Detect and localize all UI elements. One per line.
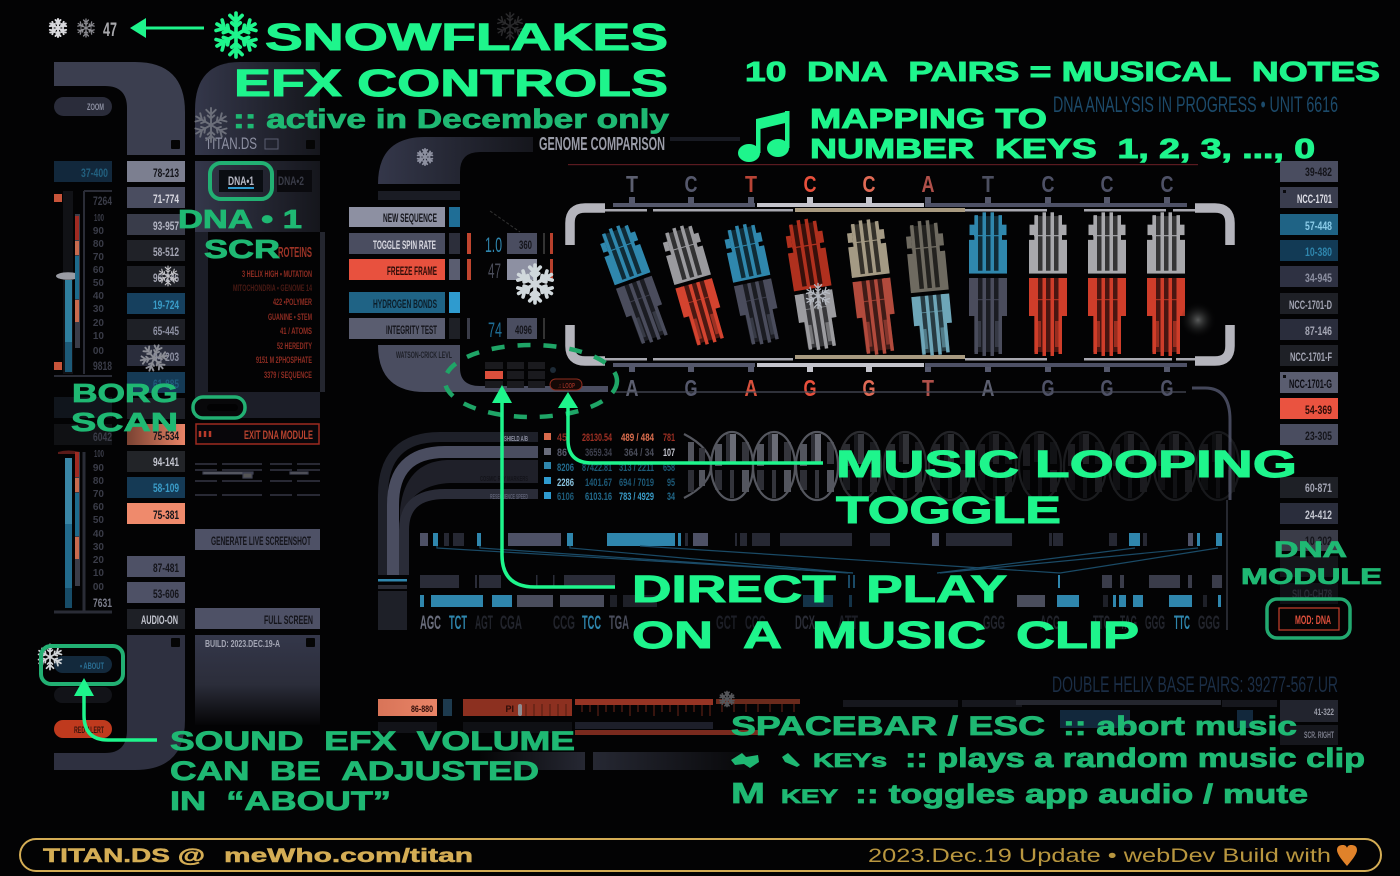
orange readout: 86-880	[411, 704, 433, 714]
heading: efx controls: EFX CONTROLS	[234, 63, 668, 105]
callout: DNA 1 SCR	[178, 163, 302, 264]
base letters bottom: G	[804, 375, 816, 401]
proteins readout: 3 HELIX HIGH • MUTATION	[242, 269, 312, 279]
data table: 95	[667, 477, 675, 489]
data table: 2286	[557, 477, 574, 489]
build info panel	[195, 635, 320, 725]
icon: music note	[738, 111, 790, 162]
DNA strands	[596, 212, 1185, 357]
base letters top: C	[862, 171, 876, 197]
right code buttons: 10-202	[1305, 534, 1332, 548]
control buttons	[349, 207, 460, 339]
right code buttons: NCC-1701	[1297, 192, 1332, 206]
control buttons: NEW SEQUENCE	[383, 211, 437, 225]
base letters bottom: A	[744, 375, 758, 401]
icon: falling flake gauge	[719, 691, 735, 707]
upper slider gauge: 70	[93, 252, 104, 263]
highlight box	[210, 163, 272, 199]
panel: right code column	[1052, 92, 1339, 697]
exit DNA module button	[196, 424, 319, 444]
icon: green snowflake	[214, 13, 258, 57]
link lines between rows	[437, 546, 1218, 573]
thin data traces	[195, 464, 320, 495]
red tick gauge: PI	[505, 704, 514, 714]
data table: 694 / 7019	[619, 477, 654, 489]
red alert pill	[54, 720, 112, 738]
codon labels: TTC	[1093, 613, 1110, 634]
dim blocks under gauge: 6042	[93, 430, 112, 444]
mod DNA button: MOD: DNA	[1295, 613, 1331, 627]
code buttons: 61-885	[153, 377, 179, 391]
codon labels: CGA	[500, 613, 522, 634]
music clip grid	[485, 362, 556, 388]
codon labels: AGT	[475, 613, 493, 634]
shortcut: keys: KEYs	[813, 751, 887, 772]
icon: falling flake about	[37, 644, 63, 670]
codon labels: DCX	[795, 613, 815, 634]
panel: lower frame and data table: GGG	[1198, 613, 1220, 634]
upper slider gauge	[54, 191, 112, 376]
icon: falling flake bright	[516, 265, 554, 303]
callout: keyboard shortcuts	[731, 711, 1365, 810]
lower-left elbow frame	[54, 635, 185, 770]
callout: borg scan	[71, 378, 245, 437]
data table: SHIELD A/B	[504, 436, 528, 443]
data table: 8206	[557, 462, 574, 474]
base letters top: C	[804, 171, 816, 197]
arrow: direct play	[492, 385, 615, 587]
lower slider gauge: 90	[93, 463, 104, 474]
control buttons: HYDROGEN BONDS	[373, 297, 437, 311]
label: can be adjusted: CAN BE ADJUSTED	[170, 756, 539, 786]
viewer brackets	[570, 208, 1230, 361]
codon labels: TAG	[1120, 613, 1137, 634]
label: in about: IN “ABOUT”	[170, 786, 391, 816]
data table: 34	[667, 491, 676, 503]
proteins readout: 41 / ATOMS	[280, 326, 312, 336]
base letters bottom: G	[684, 375, 698, 401]
label: scan: SCAN	[71, 407, 178, 437]
right code buttons: SILO-CH78	[1292, 587, 1332, 601]
spin rate readouts: 74	[488, 319, 502, 342]
icon: snowflake white solid	[49, 19, 67, 37]
heading: snowflakes: SNOWFLAKES	[265, 17, 668, 59]
DNA tabs: DNA•1	[228, 174, 254, 188]
lower slider gauge: 80	[93, 476, 104, 487]
generate live screenshot button: GENERATE LIVE SCREENSHOT	[211, 534, 311, 548]
code buttons: 58-512	[153, 245, 179, 259]
sequence bar row 1	[420, 533, 1222, 546]
codon labels: GGG	[1145, 613, 1165, 634]
codon labels: ATT	[838, 613, 858, 634]
heading: on a music clip: ON A MUSIC CLIP	[632, 615, 1139, 657]
upper slider gauge: 60	[93, 265, 104, 276]
loop toggle: ♫ LOOP	[558, 383, 575, 390]
data table: 6106	[557, 491, 574, 503]
code buttons: 53-606	[153, 587, 179, 601]
about button: • ABOUT	[80, 661, 104, 671]
label: DNA: DNA	[1274, 537, 1347, 562]
upper slider gauge: 9818	[93, 359, 112, 373]
heading: direct play: DIRECT PLAY	[632, 569, 1007, 611]
base letters bottom: T	[922, 375, 934, 401]
right code buttons	[1280, 161, 1338, 604]
base letters top: C	[1160, 171, 1174, 197]
sequence bar row 3	[420, 595, 1221, 607]
spin rate readouts: 1.0	[485, 234, 502, 257]
heading: genome comparison: GENOME COMPARISON	[539, 134, 665, 154]
codon labels: TGA	[609, 613, 629, 634]
base letters top: C	[1100, 171, 1114, 197]
proteins readout	[233, 244, 312, 380]
base letters top: T	[745, 171, 757, 197]
label: DNA 1: DNA • 1	[178, 204, 302, 234]
data table: 1401.67	[585, 477, 612, 489]
dim blocks under gauge	[54, 397, 112, 445]
icon: snowflake thin	[77, 19, 95, 37]
footer update note: 2023.Dec.19 Update • webDev Build with	[868, 846, 1331, 867]
upper slider gauge: 50	[93, 278, 104, 289]
upper slider gauge: 90	[93, 226, 104, 237]
right code buttons: NCC-1701-F	[1290, 350, 1332, 364]
panel: code button column	[127, 161, 185, 629]
icon: falling flake column	[158, 266, 178, 286]
base letters bottom: G	[1100, 375, 1114, 401]
loop toggle	[550, 379, 582, 390]
lower slider gauge: 7631	[93, 596, 112, 610]
top-left elbow frame	[54, 62, 185, 155]
data table	[480, 432, 676, 503]
highlight box	[1267, 599, 1350, 638]
code buttons: 58-109	[153, 481, 179, 495]
titan header	[195, 62, 320, 155]
data table: 107	[663, 447, 675, 459]
base letters top: T	[626, 171, 638, 197]
icon: falling flake top	[496, 12, 524, 40]
heading: music looping: MUSIC LOOPING	[836, 444, 1297, 486]
upper slider gauge: 30	[93, 304, 104, 315]
note: active in December: :: active in December only	[233, 104, 669, 134]
right code buttons: 23-305	[1305, 429, 1332, 443]
heading: toggle: TOGGLE	[836, 490, 1061, 532]
button 37-400: 37-400	[81, 166, 108, 180]
generate live screenshot button	[195, 529, 320, 550]
shortcut: abort music: :: abort music	[1063, 711, 1297, 741]
arrow: music looping	[558, 392, 823, 463]
data table: 3659.34	[585, 447, 613, 459]
data table: COSMIC RAY MARKERS	[480, 476, 528, 483]
full screen button	[195, 608, 320, 629]
upper slider gauge: 40	[93, 291, 104, 302]
curved frame bands	[378, 388, 1230, 630]
build info panel: BUILD: 2023.DEC.19-A	[205, 639, 280, 650]
code buttons: 75-381	[153, 508, 179, 522]
upper slider gauge: 80	[93, 239, 104, 250]
bottom elbow frame	[378, 345, 608, 392]
label: borg: BORG	[72, 378, 178, 408]
lower slider gauge: 60	[93, 502, 104, 513]
data table: 87422.81	[582, 462, 612, 474]
right code buttons: 60-871	[1305, 481, 1332, 495]
codon labels: GGG	[983, 613, 1005, 634]
sequence bar row 2	[420, 575, 1222, 588]
full screen button: FULL SCREEN	[264, 613, 313, 627]
data table: 313 / 2211	[619, 462, 654, 474]
code buttons: 71-774	[153, 192, 179, 206]
icon: falling flake titan	[194, 108, 228, 142]
inner rails	[605, 208, 1195, 360]
code buttons: 93-957	[153, 219, 179, 233]
codon labels	[420, 613, 1220, 634]
spin rate readouts: 4096	[515, 323, 532, 337]
code buttons: AUDIO-ON	[141, 613, 178, 627]
counter 47: 47	[103, 20, 117, 41]
callout: music looping toggle	[836, 444, 1297, 532]
footer url: meWho.com/titan	[224, 846, 473, 867]
icon: heart	[1337, 845, 1357, 866]
callout: about sound efx	[41, 646, 575, 816]
proteins readout: 52 HEREDITY	[277, 341, 312, 351]
dim lower bars	[378, 722, 760, 770]
footer frame	[20, 839, 1381, 871]
base letters top: C	[684, 171, 698, 197]
shortcut: random clip: :: plays a random music clip	[905, 743, 1365, 773]
base letters bottom: G	[1160, 375, 1174, 401]
codon labels: AGC	[420, 613, 441, 634]
codon labels: TCC	[582, 613, 601, 634]
shortcut: spacebar esc: SPACEBAR / ESC	[731, 711, 1045, 741]
lower slider gauge: 00	[93, 582, 104, 593]
codon labels: GCT	[716, 613, 737, 634]
control buttons: FREEZE FRAME	[387, 264, 437, 278]
data table: 86	[557, 447, 567, 459]
footer brand: TITAN.DS @	[43, 846, 205, 867]
codon labels: CCG	[745, 613, 766, 634]
label: module: MODULE	[1241, 564, 1382, 589]
right code buttons: 57-448	[1305, 219, 1332, 233]
code buttons: 78-213	[153, 166, 179, 180]
arrow: to about	[74, 678, 157, 740]
blurred glow flake	[1180, 302, 1216, 338]
code buttons	[127, 161, 185, 629]
mod DNA button	[1279, 608, 1339, 630]
lower slider gauge: 70	[93, 489, 104, 500]
code buttons: 94-141	[153, 455, 179, 469]
lower slider gauge	[54, 449, 112, 612]
right code buttons: 39-482	[1305, 165, 1332, 179]
icon: falling flake strand	[805, 283, 831, 309]
panel: left LCARS column	[54, 62, 185, 770]
base letters bottom: A	[626, 375, 638, 401]
icon: falling flake blurry	[137, 341, 171, 375]
codon labels: TCT	[449, 613, 467, 634]
label: SCR: SCR	[204, 234, 280, 264]
base letters bottom: G	[1042, 375, 1054, 401]
code buttons: 96-246	[153, 271, 179, 285]
data table: 783 / 4929	[619, 491, 654, 503]
titan header: TITAN.DS	[205, 134, 257, 153]
data table: 6103.16	[585, 491, 612, 503]
base letters top: A	[922, 171, 934, 197]
dim pill	[54, 687, 112, 703]
heading: DNA pairs: 10 DNA PAIRS = MUSICAL NOTES	[745, 56, 1380, 87]
upper slider gauge: 7264	[93, 194, 112, 208]
code buttons: 87-481	[153, 561, 179, 575]
snowflake particles	[37, 12, 831, 707]
codon labels: ACG	[1040, 613, 1060, 634]
code buttons: 75-534	[153, 429, 179, 443]
code buttons: 94-203	[153, 350, 179, 364]
spin rate readouts	[467, 211, 553, 342]
proteins readout: ROTEINS	[278, 244, 312, 261]
proteins readout: GUANINE • STEM	[268, 312, 312, 322]
base letters bottom	[626, 375, 1174, 401]
panel: bottom status bars	[378, 699, 1338, 770]
zoom pill: ZOOM	[87, 102, 104, 112]
red tick gauge	[463, 699, 800, 716]
button 37-400	[54, 161, 112, 182]
chart: DNA sequence viewer	[568, 164, 1230, 401]
data table: 489 / 484	[621, 432, 655, 444]
codon labels: CCG	[553, 613, 575, 634]
highlight box	[41, 646, 123, 684]
upper slider gauge: 100	[94, 213, 104, 224]
panel: lower frame and data table	[378, 388, 1239, 634]
code buttons: 65-445	[153, 324, 179, 338]
zoom pill	[54, 97, 112, 116]
about button	[54, 656, 112, 673]
base letters bottom: G	[862, 375, 876, 401]
shortcut: M: M	[731, 778, 765, 810]
DNA tabs: DNA•2	[278, 174, 304, 188]
proteins readout: 422 •POLYMER	[273, 297, 312, 307]
upper slider gauge: 00	[93, 346, 104, 357]
data table: 28130.54	[582, 432, 613, 444]
bottom elbow frame: WATSON-CRICK LEVL	[396, 350, 452, 360]
panel: DNA controls	[349, 134, 740, 392]
proteins readout: 9151 M 2PHOSPHATE	[256, 355, 312, 365]
lower slider gauge: 50	[93, 515, 104, 526]
callout: music clip selection ellipse	[445, 345, 617, 417]
upper slider gauge: 20	[93, 318, 104, 329]
callout: direct play	[632, 569, 1139, 657]
exit DNA module button: EXIT DNA MODULE	[244, 428, 313, 442]
right code buttons: 34-945	[1305, 271, 1332, 285]
footer bar	[20, 839, 1381, 871]
shortcut: key: KEY	[781, 787, 838, 808]
callout: DNA module	[1241, 537, 1382, 638]
dim right status block	[843, 700, 1338, 745]
base letters top	[626, 171, 1174, 197]
right code buttons: 24-412	[1305, 508, 1332, 522]
callout: snowflakes EFX controls	[103, 13, 669, 134]
right code buttons: 10-380	[1305, 245, 1332, 259]
data table: 364 / 34	[624, 447, 655, 459]
label: sound efx volume: SOUND EFX VOLUME	[170, 726, 575, 756]
proteins frame	[195, 232, 320, 418]
spin rate readouts: 360	[519, 238, 532, 252]
proteins readout: MITOCHONDRIA • GENOME 14	[233, 283, 312, 293]
highlight pill	[193, 397, 245, 418]
arrow: to snowflake counter	[130, 18, 204, 38]
lower slider gauge: 30	[93, 542, 104, 553]
lower slider gauge: 100	[94, 449, 104, 460]
codon labels: TTC	[1174, 613, 1190, 634]
lower slider gauge: 10	[93, 568, 104, 579]
helix waveform	[684, 432, 1239, 500]
orange readout	[378, 699, 437, 716]
heading: number keys: NUMBER KEYS 1, 2, 3, ..., 0	[810, 133, 1315, 164]
upper slider gauge: 10	[93, 331, 104, 342]
icon: arrow keys	[731, 753, 800, 768]
right code buttons: 87-146	[1305, 324, 1332, 338]
top elbow frame	[378, 137, 533, 184]
code buttons: 19-724	[153, 298, 179, 312]
red alert pill: RED ALERT	[74, 725, 104, 735]
shortcut: toggle audio: :: toggles app audio / mute	[855, 779, 1308, 809]
spin rate readouts: 47	[488, 260, 501, 283]
icon: falling flake frame	[417, 149, 433, 165]
base letters bottom: A	[982, 375, 994, 401]
base letters top: T	[982, 171, 994, 197]
right code buttons: NCC-1701-D	[1289, 298, 1332, 312]
panel: TITAN.DS sidebar	[195, 62, 325, 725]
lower slider gauge: 20	[93, 555, 104, 566]
data table: RESEQUENCE SPEED	[490, 494, 528, 501]
data table: 658	[663, 462, 675, 474]
data table: 781	[663, 432, 675, 444]
lower slider gauge: 40	[93, 529, 104, 540]
DNA tabs	[195, 161, 320, 232]
right code buttons: NCC-1701-G	[1289, 377, 1332, 391]
dim right status block: SCR. RIGHT	[1304, 730, 1334, 740]
control buttons: INTEGRITY TEST	[386, 323, 437, 337]
connector bars	[568, 164, 1198, 392]
data table: 45	[557, 432, 567, 444]
callout: DNA musical notes	[738, 56, 1380, 164]
control buttons: TOGGLE SPIN RATE	[373, 238, 436, 252]
dim right status block: 41-322	[1314, 707, 1334, 717]
base letters top: C	[1042, 171, 1054, 197]
proteins readout: 3379 / SEQUENCE	[264, 370, 312, 380]
right code buttons: 54-369	[1305, 403, 1332, 417]
heading: mapping to: MAPPING TO	[810, 103, 1047, 134]
